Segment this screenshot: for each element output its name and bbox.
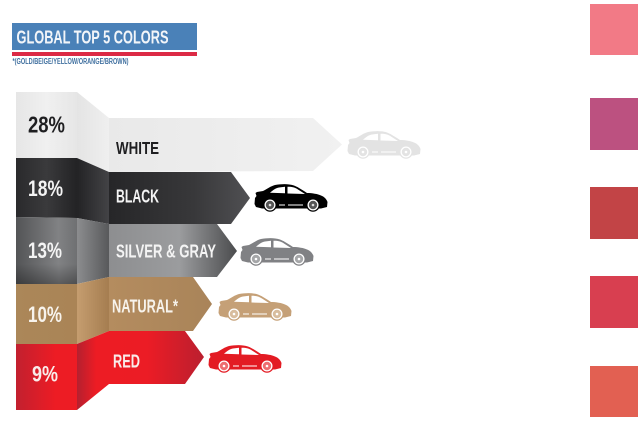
swatch: pink	[590, 4, 638, 55]
title banner	[12, 23, 197, 56]
title: GLOBAL TOP 5 COLORS	[16, 26, 168, 48]
swatch: coral	[590, 366, 638, 417]
swatch: magenta	[590, 98, 638, 150]
label: SILVER & GRAY	[116, 242, 216, 262]
band: white 28%	[16, 92, 342, 172]
swatch: crimson	[590, 276, 638, 328]
percent: 9%	[32, 362, 58, 386]
band: silver and gray 13%	[16, 217, 237, 284]
band: red 9%	[16, 331, 204, 410]
icon: gray car	[240, 238, 314, 266]
label: RED	[113, 352, 140, 372]
icon: red car	[208, 345, 282, 373]
label: WHITE	[116, 138, 159, 158]
percent: 28%	[28, 112, 65, 138]
footnote: *(GOLD/BEIGE/YELLOW/ORANGE/BROWN)	[12, 57, 129, 66]
percent: 18%	[28, 176, 63, 201]
percent: 13%	[28, 238, 62, 263]
swatch: brick red	[590, 187, 638, 239]
label: BLACK	[116, 186, 159, 206]
label: NATURAL*	[112, 296, 178, 316]
percent: 10%	[28, 302, 62, 327]
icon: black car	[254, 184, 328, 212]
band: black 18%	[16, 158, 250, 224]
band: natural 10%	[16, 277, 212, 344]
icon: tan car	[218, 293, 292, 321]
icon: white car	[348, 131, 420, 159]
